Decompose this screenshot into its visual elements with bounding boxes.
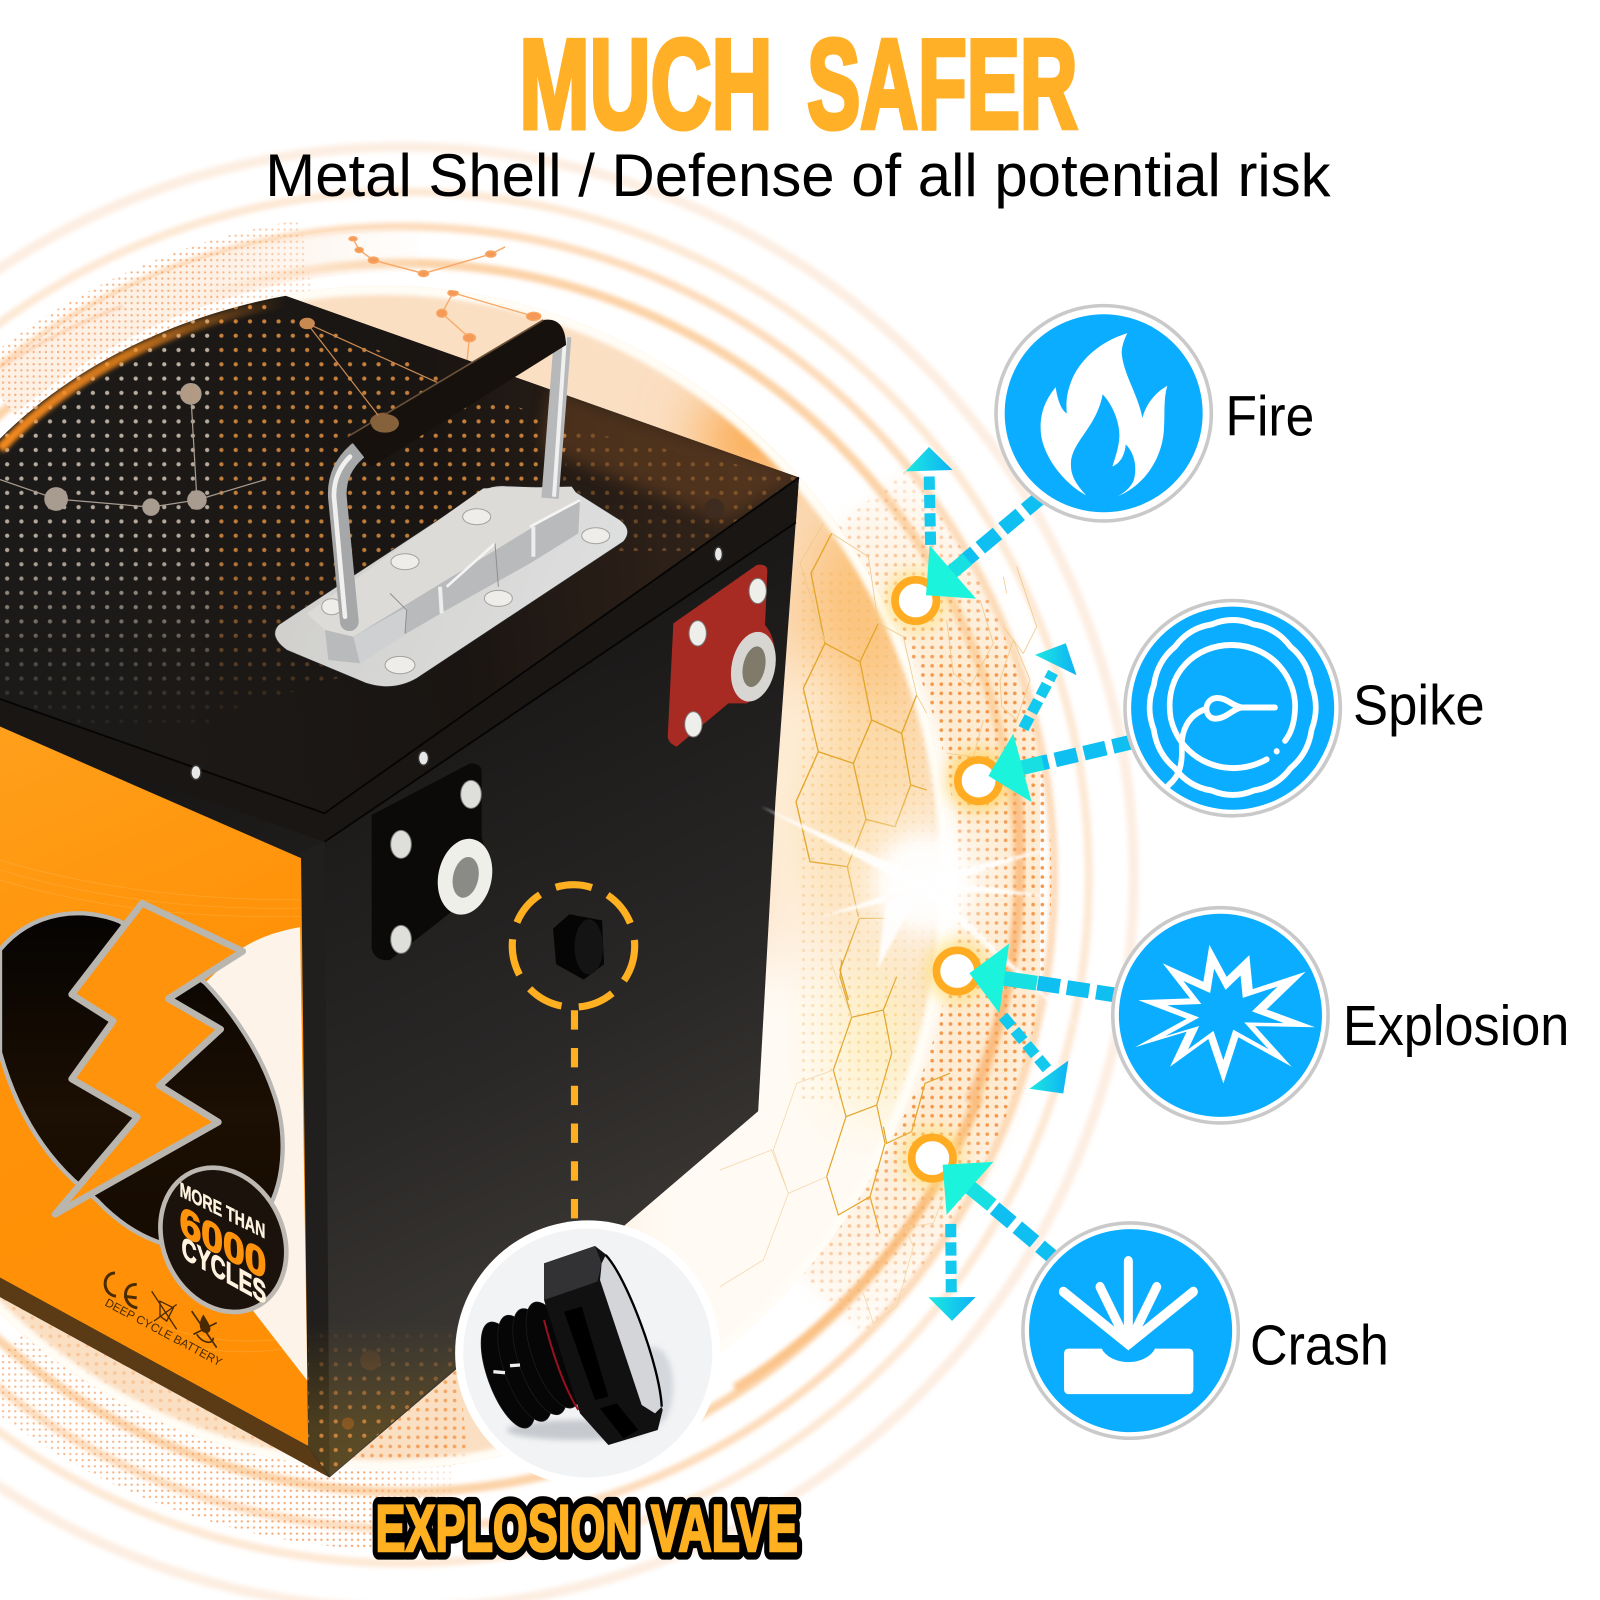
dashed highlight ring bbox=[512, 885, 635, 1007]
explosion valve on battery bbox=[512, 885, 635, 1007]
arrow: explosion deflected bbox=[1003, 1016, 1068, 1093]
battery silhouette and side face bbox=[0, 296, 799, 1478]
mounting plate bbox=[275, 486, 628, 687]
label artwork bbox=[0, 860, 309, 1381]
glowing sphere behind battery bbox=[0, 281, 959, 1480]
dotted energy bands bbox=[0, 237, 1021, 1505]
honeycomb hexagon lines lower bbox=[720, 960, 950, 1323]
fine swoosh lines bbox=[0, 860, 307, 1352]
explosion valve label: EXPLOSION bbox=[376, 1492, 638, 1566]
badge text: 6000 bbox=[180, 1198, 266, 1289]
badge text bbox=[180, 1177, 266, 1311]
arrow: fire impact bbox=[926, 495, 1043, 599]
terminals bbox=[372, 565, 782, 960]
icon: crash bbox=[1023, 1223, 1238, 1438]
dashed valve connector bbox=[571, 1010, 578, 1219]
badge text: CYCLES bbox=[182, 1229, 266, 1311]
badge text: MORE THAN bbox=[180, 1177, 265, 1243]
subtitle: Metal Shell / Defense of all potential risk bbox=[265, 142, 1331, 209]
deep cycle battery caption: DEEP CYCLE BATTERY bbox=[103, 1296, 224, 1369]
explosion valve label: VALVE bbox=[651, 1492, 798, 1566]
icon: fire bbox=[996, 306, 1211, 521]
black shield emblem bbox=[0, 913, 283, 1245]
valve photo illustration bbox=[470, 1246, 673, 1445]
compliance marks bbox=[105, 1273, 217, 1348]
label: explosion: Explosion bbox=[1343, 994, 1569, 1057]
arrow: crash impact bbox=[943, 1162, 1057, 1261]
black negative terminal bbox=[372, 763, 499, 960]
label: fire: Fire bbox=[1226, 385, 1314, 448]
valve detail circle bbox=[455, 1220, 720, 1486]
hinge block bbox=[307, 487, 580, 637]
battery top face bbox=[0, 296, 799, 813]
metal posts bbox=[550, 337, 563, 498]
explosion valve label: VALVE bbox=[651, 1492, 798, 1566]
label: spike: Spike bbox=[1353, 673, 1485, 736]
battery body bbox=[0, 286, 806, 1478]
title bbox=[519, 14, 1078, 156]
arrow: explosion impact bbox=[969, 944, 1118, 1013]
icon: explosion bbox=[1113, 908, 1328, 1123]
front corner strip bbox=[299, 842, 330, 1478]
lid band edge bbox=[0, 478, 799, 842]
honeycomb hexagon lines upper bbox=[796, 523, 1037, 1000]
title: SAFER bbox=[807, 14, 1078, 156]
impact point: crash bbox=[902, 1128, 963, 1189]
explosion valve label: EXPLOSION bbox=[376, 1492, 638, 1566]
top constellation bbox=[349, 237, 505, 277]
label: crash: Crash bbox=[1250, 1313, 1389, 1376]
plate screws bbox=[322, 509, 610, 674]
red positive terminal bbox=[668, 565, 782, 747]
icon: spike bbox=[1125, 601, 1340, 816]
orange front label bbox=[0, 727, 330, 1478]
sphere constellation bbox=[436, 290, 542, 360]
arrow: fire deflected bbox=[906, 447, 953, 545]
corner screws bbox=[191, 547, 722, 780]
cycles badge bbox=[137, 1147, 309, 1333]
impact point: explosion bbox=[927, 940, 988, 1002]
cream swoosh bbox=[205, 927, 307, 1381]
side face lower dots bbox=[308, 1334, 456, 1476]
arrow: crash deflected bbox=[928, 1224, 976, 1321]
black grip bbox=[348, 320, 566, 467]
title: MUCH bbox=[519, 14, 772, 156]
impact point: fire bbox=[885, 570, 946, 631]
arrow: spike impact bbox=[988, 734, 1135, 802]
sun flare bbox=[760, 806, 1082, 1031]
handle assembly bbox=[275, 320, 628, 687]
impact point: spike bbox=[948, 750, 1009, 811]
energy shield background rings bbox=[0, 147, 1134, 1600]
lightning bolt bbox=[55, 903, 243, 1214]
constellation marks bbox=[0, 318, 723, 517]
arrow: spike deflected bbox=[1023, 643, 1077, 729]
